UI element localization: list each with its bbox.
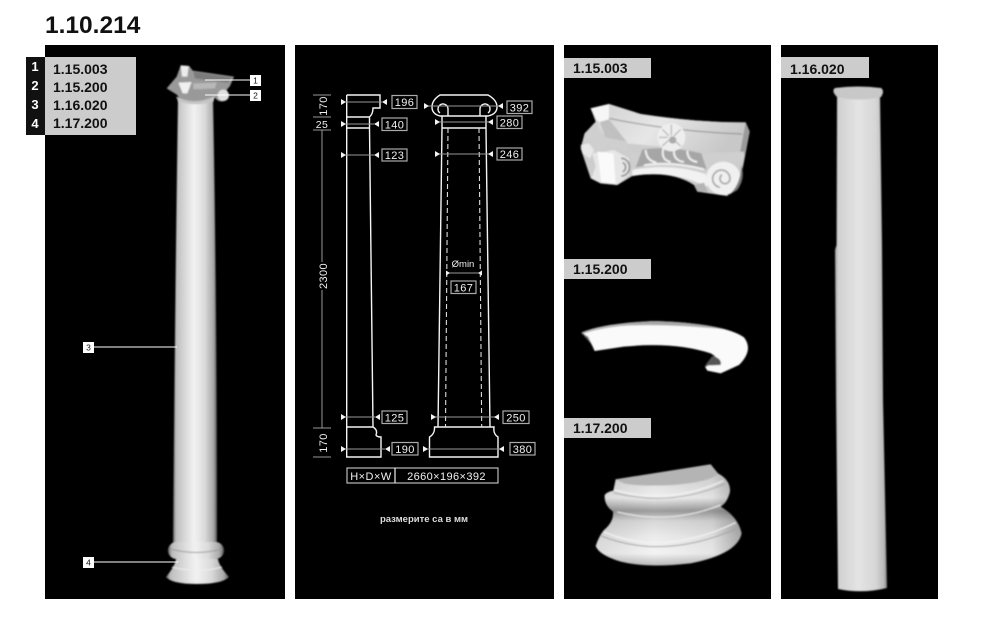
title: 1.10.214	[45, 12, 141, 39]
callout 1	[205, 75, 261, 86]
column capital	[167, 65, 234, 104]
parts legend: 4	[31, 116, 39, 131]
parts legend	[26, 57, 136, 135]
column base	[166, 542, 229, 584]
dimension 125: 125	[385, 412, 404, 424]
label 1.16.020: 1.16.020	[790, 61, 845, 77]
overall height dimensions: 170	[318, 433, 330, 453]
panel: assembled column	[26, 45, 285, 599]
parts legend: 3	[31, 97, 39, 112]
callout 4	[83, 557, 178, 568]
dimension 123	[341, 149, 407, 162]
dimension 250: 250	[506, 412, 526, 424]
dimension 140	[341, 118, 407, 132]
callout 2	[205, 90, 261, 101]
dimension 392: 392	[510, 102, 529, 114]
dimension 380: 380	[513, 444, 532, 456]
front elevation drawing	[430, 95, 498, 457]
dimension 250	[431, 411, 529, 424]
dimension 280	[435, 116, 522, 130]
dimension 140: 140	[385, 120, 404, 132]
callout 3	[83, 342, 177, 353]
label 1.17.200	[564, 418, 651, 438]
panel: parts	[564, 45, 771, 599]
shaft part image	[833, 86, 887, 591]
dimension 196: 196	[395, 97, 414, 109]
parts legend: 1	[31, 59, 39, 74]
dimension 196	[341, 96, 417, 109]
size table	[347, 468, 498, 483]
callout 2: 2	[253, 90, 258, 100]
size table: 2660×196×392	[407, 471, 486, 483]
dimension 392	[424, 101, 532, 114]
dimension minimum diameter: 167	[454, 282, 473, 294]
dimension 380	[423, 442, 535, 456]
panel: technical drawing	[295, 45, 554, 599]
label 1.17.200: 1.17.200	[573, 420, 628, 436]
dimension 246: 246	[500, 149, 519, 161]
side profile drawing	[347, 95, 381, 457]
dimension 125	[341, 411, 407, 424]
dimension 280: 280	[500, 118, 519, 130]
overall height dimensions: 170	[318, 96, 330, 116]
callout 3: 3	[86, 342, 91, 352]
units note: размерите са в мм	[380, 514, 468, 525]
parts legend: 1.17.200	[53, 115, 108, 131]
label 1.16.020	[781, 57, 869, 78]
size table: H×D×W	[350, 471, 392, 483]
parts legend: 1.15.003	[53, 61, 108, 77]
label 1.15.200: 1.15.200	[573, 261, 628, 277]
capital part image	[581, 104, 750, 196]
ring part image	[582, 321, 748, 373]
overall height dimensions: 25	[316, 119, 328, 131]
parts legend: 1.15.200	[53, 79, 108, 95]
panel: shaft part	[781, 45, 938, 599]
overall height dimensions: 2300	[318, 263, 330, 289]
overall height dimensions	[313, 95, 331, 457]
dimension minimum diameter: Ømin	[452, 259, 474, 270]
dimension 190: 190	[395, 444, 415, 456]
column shaft	[173, 100, 217, 546]
callout 1: 1	[253, 76, 258, 86]
dimension 123: 123	[385, 150, 404, 162]
dimension 190	[341, 442, 418, 456]
base part image	[596, 464, 742, 565]
parts legend: 1.16.020	[53, 97, 108, 113]
dimension minimum diameter	[446, 259, 482, 294]
parts legend: 2	[31, 78, 39, 93]
dimension 246	[435, 148, 522, 161]
label 1.15.003: 1.15.003	[573, 60, 628, 76]
callout 4: 4	[86, 558, 91, 568]
label 1.15.003	[564, 58, 651, 78]
label 1.15.200	[564, 259, 651, 279]
